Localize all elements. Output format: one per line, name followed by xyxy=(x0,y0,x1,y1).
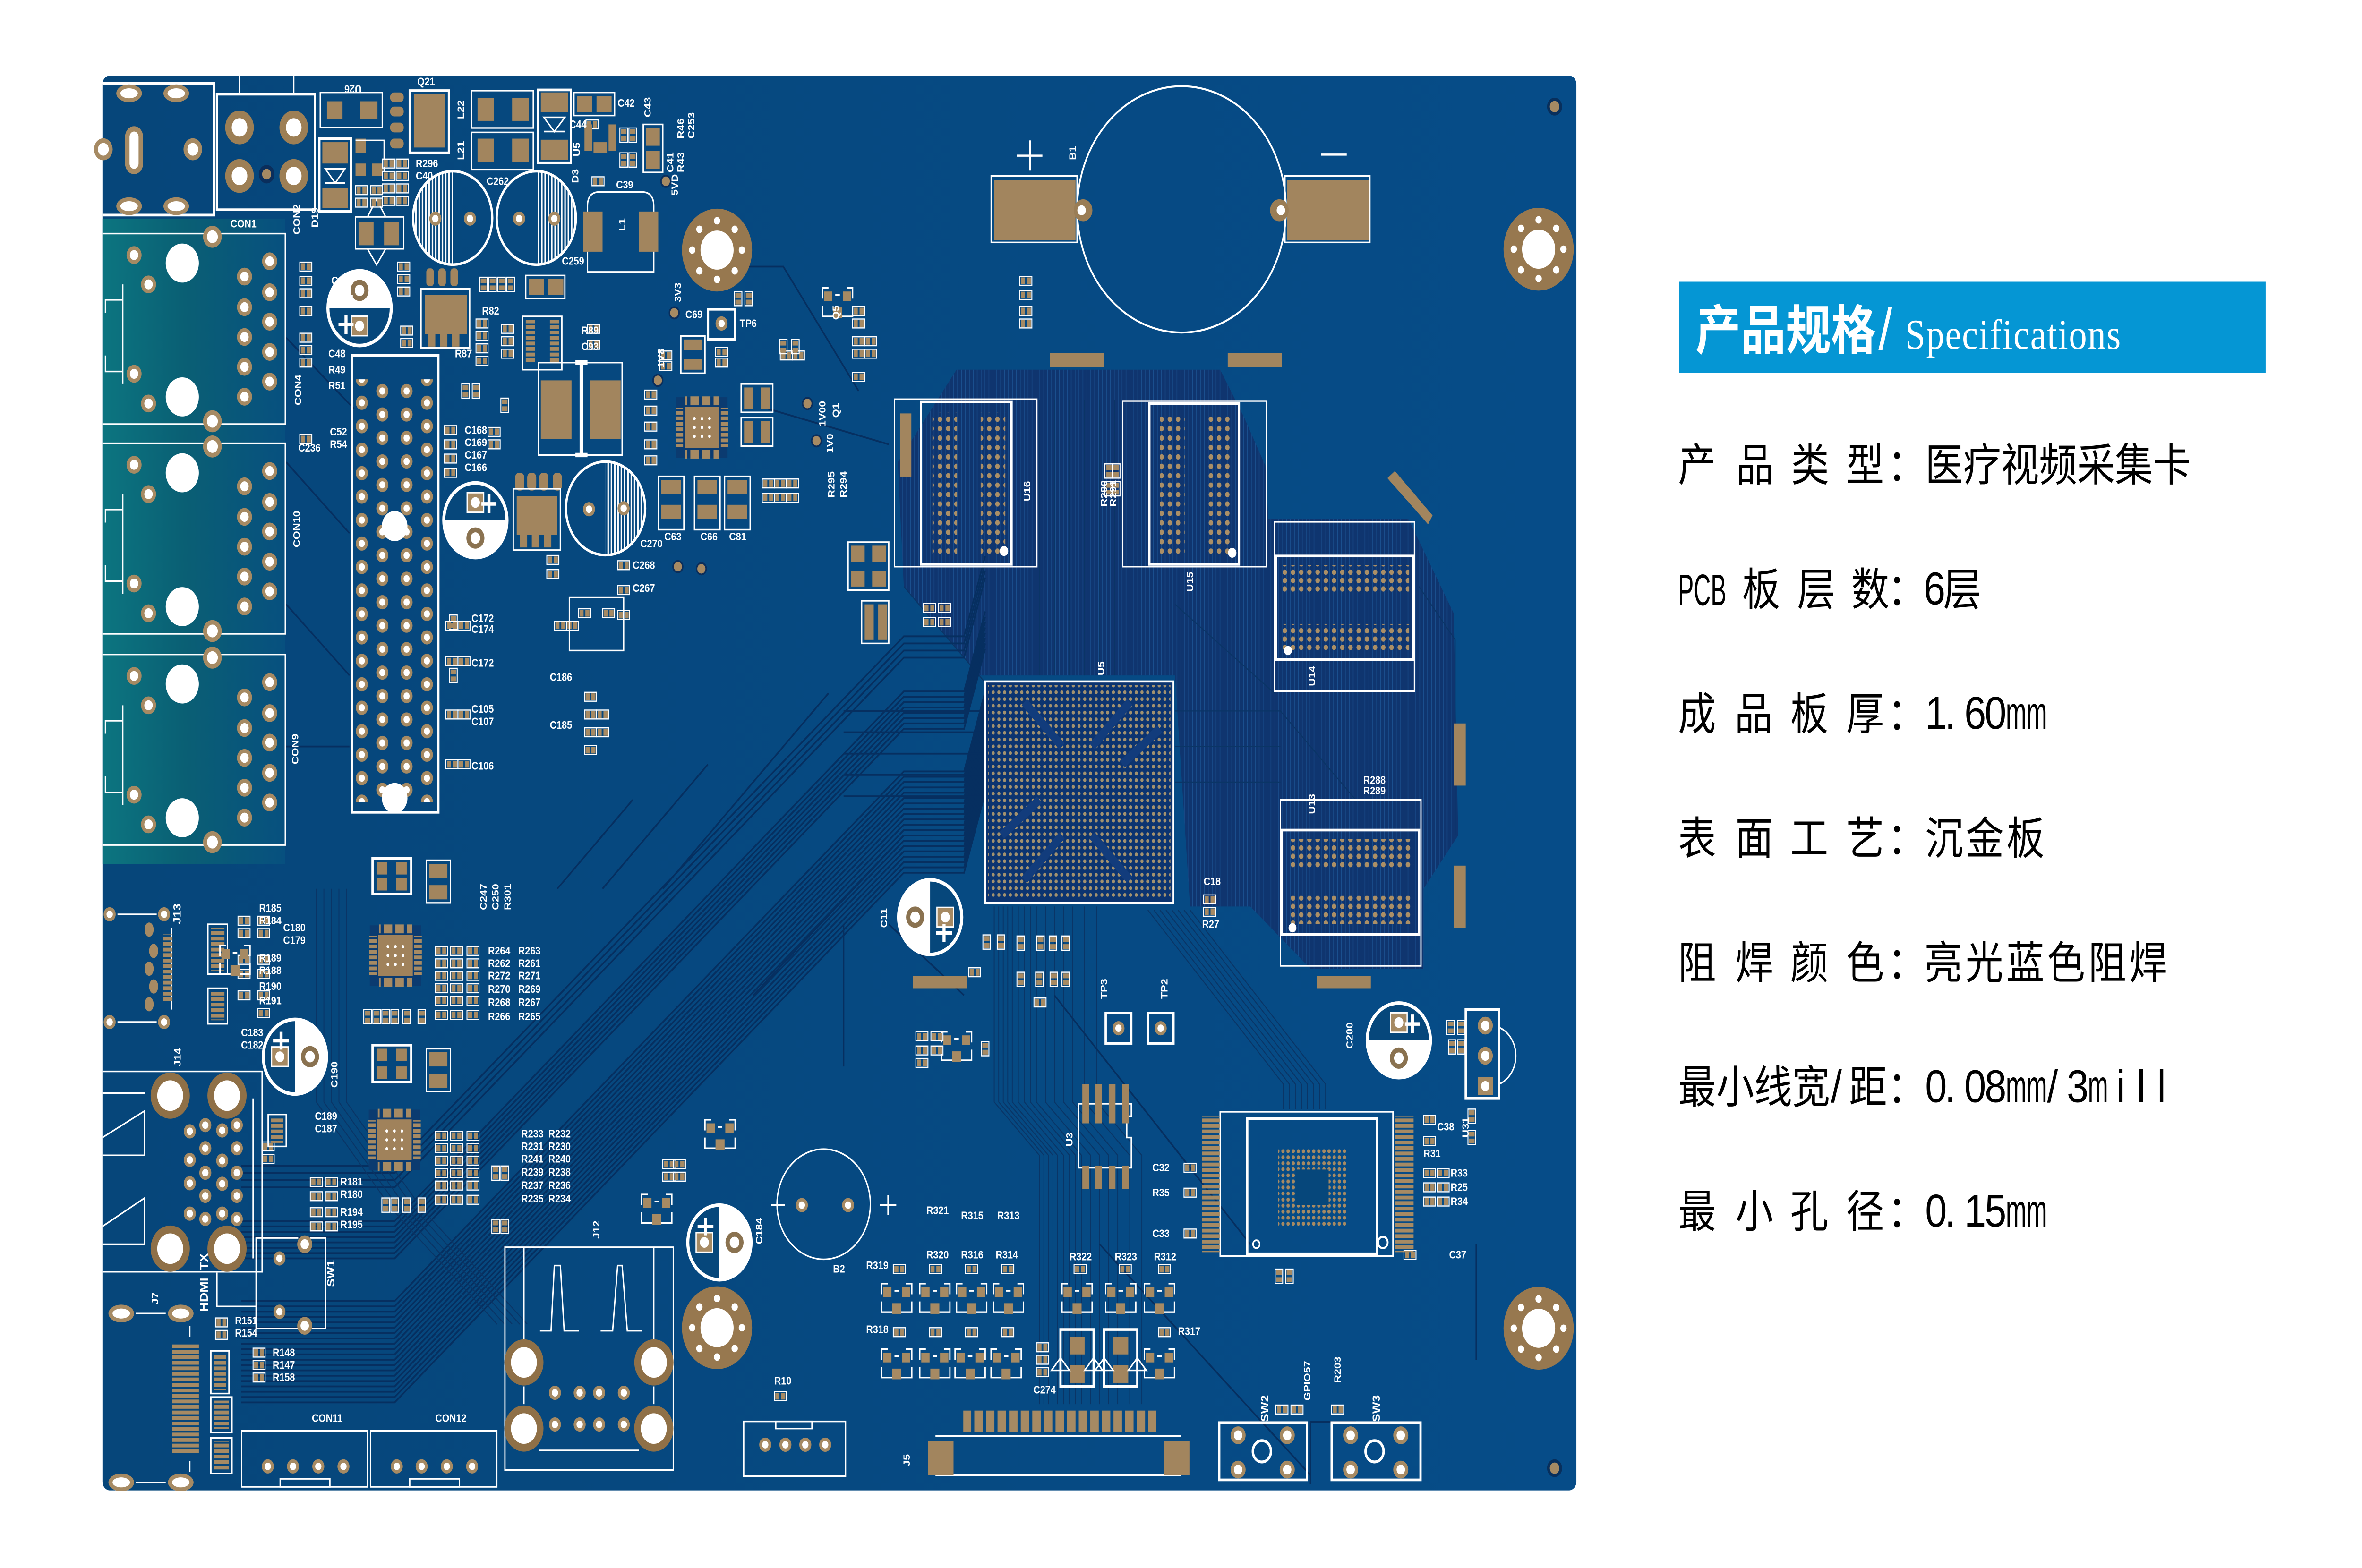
silkscreen labels: L22 xyxy=(455,100,466,119)
silkscreen labels: R235 xyxy=(521,1192,544,1205)
silkscreen labels: J12 xyxy=(591,1220,602,1239)
silkscreen labels: U31 xyxy=(1460,1117,1471,1138)
silkscreen labels: CON11 xyxy=(312,1412,342,1424)
silkscreen labels: C190 xyxy=(329,1061,340,1088)
silkscreen labels: R267 xyxy=(518,996,540,1009)
silkscreen labels: R31 xyxy=(1423,1147,1441,1159)
spec row: min line width and spacing: m xyxy=(2088,1061,2108,1112)
silkscreen labels: R315 xyxy=(961,1209,984,1222)
silkscreen labels: C81 xyxy=(729,530,746,543)
silkscreen labels: R151 xyxy=(235,1314,257,1327)
silkscreen labels: R288 xyxy=(1363,774,1386,786)
spec row: min line width and spacing: mm xyxy=(2006,1061,2047,1112)
silkscreen labels: C183 xyxy=(241,1026,263,1039)
silkscreen labels: R294 xyxy=(838,471,849,498)
connector J1 xyxy=(744,1422,846,1476)
diagonal signal trace bundle xyxy=(241,267,1476,1484)
silkscreen labels: R272 xyxy=(488,969,510,982)
silkscreen labels: C250 xyxy=(490,884,501,910)
silkscreen labels: R27 xyxy=(1202,918,1219,930)
switch SW1 xyxy=(217,1236,325,1335)
silkscreen labels: SW2 xyxy=(1259,1395,1271,1422)
silkscreen labels: C105 xyxy=(471,703,494,716)
spec row: min line width and spacing: 0.08 xyxy=(1925,1061,2006,1112)
silkscreen labels: C42 xyxy=(617,96,635,109)
silkscreen labels: R51 xyxy=(328,379,345,392)
silkscreen labels: CON2 xyxy=(291,204,302,235)
VGA connector J14 xyxy=(103,1072,262,1272)
battery holder xyxy=(991,86,1370,332)
silkscreen labels: R322 xyxy=(1070,1250,1092,1263)
silkscreen labels: B1 xyxy=(1067,146,1078,160)
flat flex connector J5 xyxy=(928,1411,1190,1475)
silkscreen labels: CON10 xyxy=(291,511,302,547)
silkscreen labels: R317 xyxy=(1178,1325,1200,1338)
silkscreen labels: R301 xyxy=(502,884,513,910)
silkscreen labels: U13 xyxy=(1307,794,1317,814)
silkscreen labels: C274 xyxy=(1034,1383,1056,1396)
silkscreen labels: R231 xyxy=(521,1140,544,1152)
silkscreen labels xyxy=(150,75,1471,1466)
silkscreen labels: C172 xyxy=(471,612,494,625)
silkscreen labels: R241 xyxy=(521,1152,544,1165)
silkscreen labels: U26 xyxy=(344,83,361,95)
silkscreen labels: L1 xyxy=(616,218,627,231)
silkscreen labels: C33 xyxy=(1152,1227,1170,1240)
spec row: min hole size: 最小孔径： xyxy=(1678,1186,1926,1237)
heading banner xyxy=(1679,282,2266,373)
silkscreen labels: B2 xyxy=(833,1262,845,1275)
silkscreen labels: R261 xyxy=(518,957,540,970)
silkscreen labels: C32 xyxy=(1152,1161,1170,1174)
silkscreen labels: R239 xyxy=(521,1166,544,1178)
spec row: PCB layers xyxy=(1678,563,1981,615)
memory chip U15 xyxy=(1123,401,1267,567)
silkscreen labels: R271 xyxy=(518,969,540,982)
small passive components, left column xyxy=(208,159,798,1474)
silkscreen labels: R237 xyxy=(521,1179,544,1192)
silkscreen labels: R262 xyxy=(488,957,510,970)
silkscreen labels: U16 xyxy=(1022,481,1033,501)
spec row: solder mask colour: 阻焊颜色：亮光蓝色阻焊 xyxy=(1678,937,2167,988)
silkscreen labels: CON9 xyxy=(290,733,300,764)
silkscreen labels: Q1 xyxy=(830,403,841,418)
spec row: product type: 产品类型：医疗视频采集卡 xyxy=(1678,440,2191,491)
silkscreen labels: R184 xyxy=(259,914,282,927)
silkscreen labels: C172 xyxy=(471,656,494,669)
polarised capacitors xyxy=(263,271,1430,1280)
test points xyxy=(708,309,1173,1043)
silkscreen labels: C41 xyxy=(665,152,676,172)
silkscreen labels: C185 xyxy=(550,718,572,731)
silkscreen labels: C174 xyxy=(471,622,494,635)
silkscreen labels: C166 xyxy=(465,461,487,474)
silkscreen labels: R191 xyxy=(259,994,282,1007)
silkscreen labels: 1V0 xyxy=(824,434,835,453)
memory chip U16 xyxy=(894,399,1037,567)
silkscreen labels: R270 xyxy=(488,982,510,995)
silkscreen labels: C200 xyxy=(1344,1023,1355,1048)
silkscreen labels: J14 xyxy=(172,1048,183,1066)
silkscreen labels: R203 xyxy=(1332,1356,1343,1383)
silkscreen labels: R238 xyxy=(548,1166,571,1178)
dark copper plane around memory chips xyxy=(898,370,1458,969)
silkscreen labels: R269 xyxy=(518,982,540,995)
mounting holes xyxy=(682,98,1574,1477)
connectors CON11 and CON12 xyxy=(241,1431,497,1487)
silkscreen labels: GPIO57 xyxy=(1302,1361,1313,1401)
silkscreen labels: R320 xyxy=(926,1248,949,1261)
spec row: min hole size: mm xyxy=(2006,1185,2047,1236)
silkscreen labels: R195 xyxy=(341,1218,363,1231)
QFN chips U34 and U32 xyxy=(368,396,728,1171)
silkscreen labels: J7 xyxy=(150,1292,160,1304)
silkscreen labels: C52 xyxy=(330,425,347,438)
silkscreen labels: C93 xyxy=(582,340,599,353)
spec row: PCB layers: 层 xyxy=(1943,564,1981,615)
heading banner: Specifications xyxy=(1905,311,2121,358)
silkscreen labels: C11 xyxy=(879,908,890,928)
switch SW3 xyxy=(1332,1423,1421,1480)
silkscreen labels: C268 xyxy=(633,559,655,571)
silkscreen labels: HDMI_TX xyxy=(197,1253,211,1312)
regulator U31 xyxy=(1466,1010,1516,1145)
silkscreen labels: C267 xyxy=(633,582,655,595)
spec row: min line width and spacing xyxy=(1678,1061,2166,1113)
silkscreen labels: 1V8 xyxy=(656,349,667,368)
silkscreen labels: J13 xyxy=(171,903,183,924)
silkscreen labels: D19 xyxy=(309,207,320,228)
spec row: surface finish: 表面工艺：沉金板 xyxy=(1678,813,2045,864)
silkscreen labels: R233 xyxy=(521,1127,544,1140)
silkscreen labels: C236 xyxy=(298,441,321,454)
silkscreen labels: C184 xyxy=(753,1218,764,1244)
silkscreen labels: 3V3 xyxy=(672,282,683,302)
silkscreen labels: C270 xyxy=(640,537,662,550)
silkscreen labels: R82 xyxy=(482,305,499,317)
gold fiducial strips xyxy=(913,353,1466,988)
silkscreen labels: R189 xyxy=(259,951,282,964)
silkscreen labels: R43 xyxy=(675,152,686,172)
spec row: min line width and spacing: /3 xyxy=(2047,1061,2088,1112)
silkscreen labels: C39 xyxy=(616,178,633,191)
silkscreen labels: C43 xyxy=(642,97,653,117)
silkscreen labels: CON4 xyxy=(292,375,303,405)
small passive components, centre and right xyxy=(735,276,1465,1414)
silkscreen labels: U3 xyxy=(1064,1133,1075,1146)
silkscreen labels: C187 xyxy=(315,1122,337,1135)
silkscreen labels: J5 xyxy=(901,1454,912,1466)
silkscreen labels: C189 xyxy=(315,1109,337,1122)
network connector CON10 xyxy=(103,435,285,642)
silkscreen labels: R154 xyxy=(235,1327,257,1339)
spec row: board thickness xyxy=(1678,688,2047,739)
silkscreen labels: R54 xyxy=(330,438,347,451)
silkscreen labels: R147 xyxy=(273,1358,295,1371)
spec row: PCB layers: 板层数： xyxy=(1742,564,1926,615)
silkscreen labels: R266 xyxy=(488,1010,510,1023)
silkscreen labels: R321 xyxy=(926,1204,949,1217)
spec row: board thickness: mm xyxy=(2006,688,2047,739)
silkscreen labels: R314 xyxy=(996,1248,1018,1261)
silkscreen labels: TP6 xyxy=(740,317,757,330)
silkscreen labels: SW1 xyxy=(325,1260,337,1287)
switch SW2 xyxy=(1219,1423,1307,1480)
silkscreen labels: R181 xyxy=(341,1176,363,1188)
silkscreen labels: D3 xyxy=(570,169,581,183)
resistor arrays near QFN chips xyxy=(364,946,508,1234)
silkscreen labels: C66 xyxy=(701,530,718,543)
silkscreen labels: R268 xyxy=(488,996,510,1009)
silkscreen labels: TP3 xyxy=(1098,979,1109,999)
silkscreen labels: R190 xyxy=(259,980,282,993)
silkscreen labels: R46 xyxy=(675,119,686,139)
memory chip U13 xyxy=(1280,800,1421,966)
silkscreen labels: C253 xyxy=(686,112,697,139)
silkscreen labels: U5 xyxy=(571,142,582,156)
silkscreen labels: CON1 xyxy=(231,217,257,230)
silkscreen labels: C40 xyxy=(416,170,433,182)
spec row: min line width and spacing: / xyxy=(1831,1061,1842,1112)
silkscreen labels: U15 xyxy=(1184,571,1195,592)
spec row: min line width and spacing: 最小线宽 xyxy=(1678,1062,1830,1113)
silkscreen labels: R49 xyxy=(328,363,345,376)
USB connector J12 xyxy=(505,1247,674,1470)
silkscreen labels: R312 xyxy=(1154,1250,1176,1263)
silkscreen labels: C182 xyxy=(241,1039,263,1051)
silkscreen labels: L21 xyxy=(455,141,466,160)
silkscreen labels: R180 xyxy=(341,1188,363,1201)
silkscreen labels: R291 xyxy=(1108,480,1118,507)
spec row: PCB layers: PCB xyxy=(1678,565,1726,615)
spec row: min line width and spacing: 距： xyxy=(1849,1062,1926,1113)
silkscreen labels: R323 xyxy=(1115,1250,1137,1263)
silkscreen labels: R89 xyxy=(582,324,599,337)
spec row: min line width and spacing: ill xyxy=(2116,1061,2166,1112)
silkscreen labels: C63 xyxy=(664,530,682,543)
silkscreen labels: R234 xyxy=(548,1192,571,1205)
silkscreen labels: C179 xyxy=(283,934,306,946)
network connector CON1 xyxy=(103,226,285,432)
test point pads xyxy=(653,176,822,574)
heading banner: / xyxy=(1878,297,1892,362)
SOIC chip U3 xyxy=(1078,1084,1131,1189)
spec row: board thickness: 成品板厚： xyxy=(1678,689,1926,739)
silkscreen labels: C44 xyxy=(569,118,587,130)
silkscreen labels: R295 xyxy=(826,471,837,498)
network connector CON4 xyxy=(103,647,285,853)
silkscreen labels: C186 xyxy=(550,671,572,683)
silkscreen labels: C37 xyxy=(1449,1248,1466,1261)
silkscreen labels: C69 xyxy=(685,308,702,321)
silkscreen labels: C180 xyxy=(283,921,306,934)
silkscreen labels: U14 xyxy=(1307,666,1317,686)
silkscreen labels: R230 xyxy=(548,1140,571,1152)
panel: teal network connector area xyxy=(103,219,285,864)
silkscreen labels: R324 xyxy=(332,292,354,305)
silkscreen labels: R263 xyxy=(518,944,540,957)
silkscreen labels: R316 xyxy=(961,1248,984,1261)
top-left power connector xyxy=(94,84,214,215)
silkscreen labels: R194 xyxy=(341,1206,363,1219)
silkscreen labels: R10 xyxy=(774,1374,791,1387)
silkscreen labels: R265 xyxy=(518,1010,540,1023)
silkscreen labels: C167 xyxy=(465,448,487,461)
main BGA processor U5 xyxy=(985,682,1173,903)
spec row: min hole size: 0.15 xyxy=(1925,1185,2006,1236)
connector J13 xyxy=(103,907,172,1029)
crystals Y1 Y2 Y3 Y4 xyxy=(373,542,889,1091)
silkscreen labels: C262 xyxy=(487,175,509,187)
silkscreen labels: 5VD xyxy=(669,174,680,196)
silkscreen labels: R296 xyxy=(416,157,438,170)
silkscreen labels: R185 xyxy=(259,902,282,914)
silkscreen labels: R289 xyxy=(1363,784,1386,797)
silkscreen labels: C163 xyxy=(332,274,354,287)
silkscreen labels: 1V00 xyxy=(817,401,828,426)
spec row: board thickness: 1.60 xyxy=(1925,688,2006,739)
silkscreen labels: R25 xyxy=(1451,1181,1468,1193)
silkscreen labels: C18 xyxy=(1204,875,1221,888)
silkscreen labels: C259 xyxy=(562,255,584,267)
silkscreen labels: R34 xyxy=(1451,1195,1468,1208)
silkscreen labels: CON12 xyxy=(436,1412,466,1424)
silkscreen labels: C106 xyxy=(471,759,494,772)
silkscreen labels: Q5 xyxy=(830,305,841,320)
silkscreen labels: C48 xyxy=(328,347,345,360)
HDMI connector J7 xyxy=(109,1304,199,1491)
silkscreen labels: R319 xyxy=(866,1259,889,1271)
silkscreen labels: R188 xyxy=(259,964,282,977)
electrolytic capacitors with hatched polarity xyxy=(413,171,645,555)
silkscreen labels: R158 xyxy=(273,1371,295,1384)
silkscreen labels: Q21 xyxy=(417,75,435,88)
memory chip U14 xyxy=(1275,522,1414,691)
silkscreen labels: C168 xyxy=(465,424,487,436)
pin header xyxy=(352,356,438,813)
top power components xyxy=(319,90,773,550)
silkscreen labels: C169 xyxy=(465,436,487,449)
silkscreen labels: R232 xyxy=(548,1127,571,1140)
silkscreen labels: R87 xyxy=(455,347,472,360)
silkscreen labels: TP2 xyxy=(1159,979,1170,999)
silkscreen labels: R236 xyxy=(548,1179,571,1192)
spec row: min hole size xyxy=(1678,1185,2047,1237)
silkscreen labels: C38 xyxy=(1437,1120,1454,1133)
silkscreen labels: C107 xyxy=(471,715,494,728)
silkscreen labels: R318 xyxy=(866,1323,889,1336)
silkscreen labels: R264 xyxy=(488,944,510,957)
spec row: PCB layers: 6 xyxy=(1924,563,1945,614)
panel: product specifications xyxy=(1678,282,2266,1237)
silkscreen labels: R35 xyxy=(1152,1186,1170,1199)
eMMC chip U4 U2 xyxy=(1202,1112,1413,1256)
silkscreen labels: R240 xyxy=(548,1152,571,1165)
silkscreen labels: C247 xyxy=(478,884,489,910)
heading banner: 产品规格 xyxy=(1695,288,1876,365)
silkscreen labels: SW3 xyxy=(1371,1395,1382,1422)
silkscreen labels: U5 xyxy=(1095,661,1106,675)
silkscreen labels: R290 xyxy=(1098,480,1109,507)
plain capacitor B2 xyxy=(771,1149,896,1259)
connector CON2 xyxy=(217,76,315,210)
silkscreen labels: R148 xyxy=(273,1346,295,1359)
silkscreen labels: R33 xyxy=(1451,1167,1468,1179)
pcb board xyxy=(94,75,1576,1491)
silkscreen labels: R313 xyxy=(997,1209,1019,1222)
